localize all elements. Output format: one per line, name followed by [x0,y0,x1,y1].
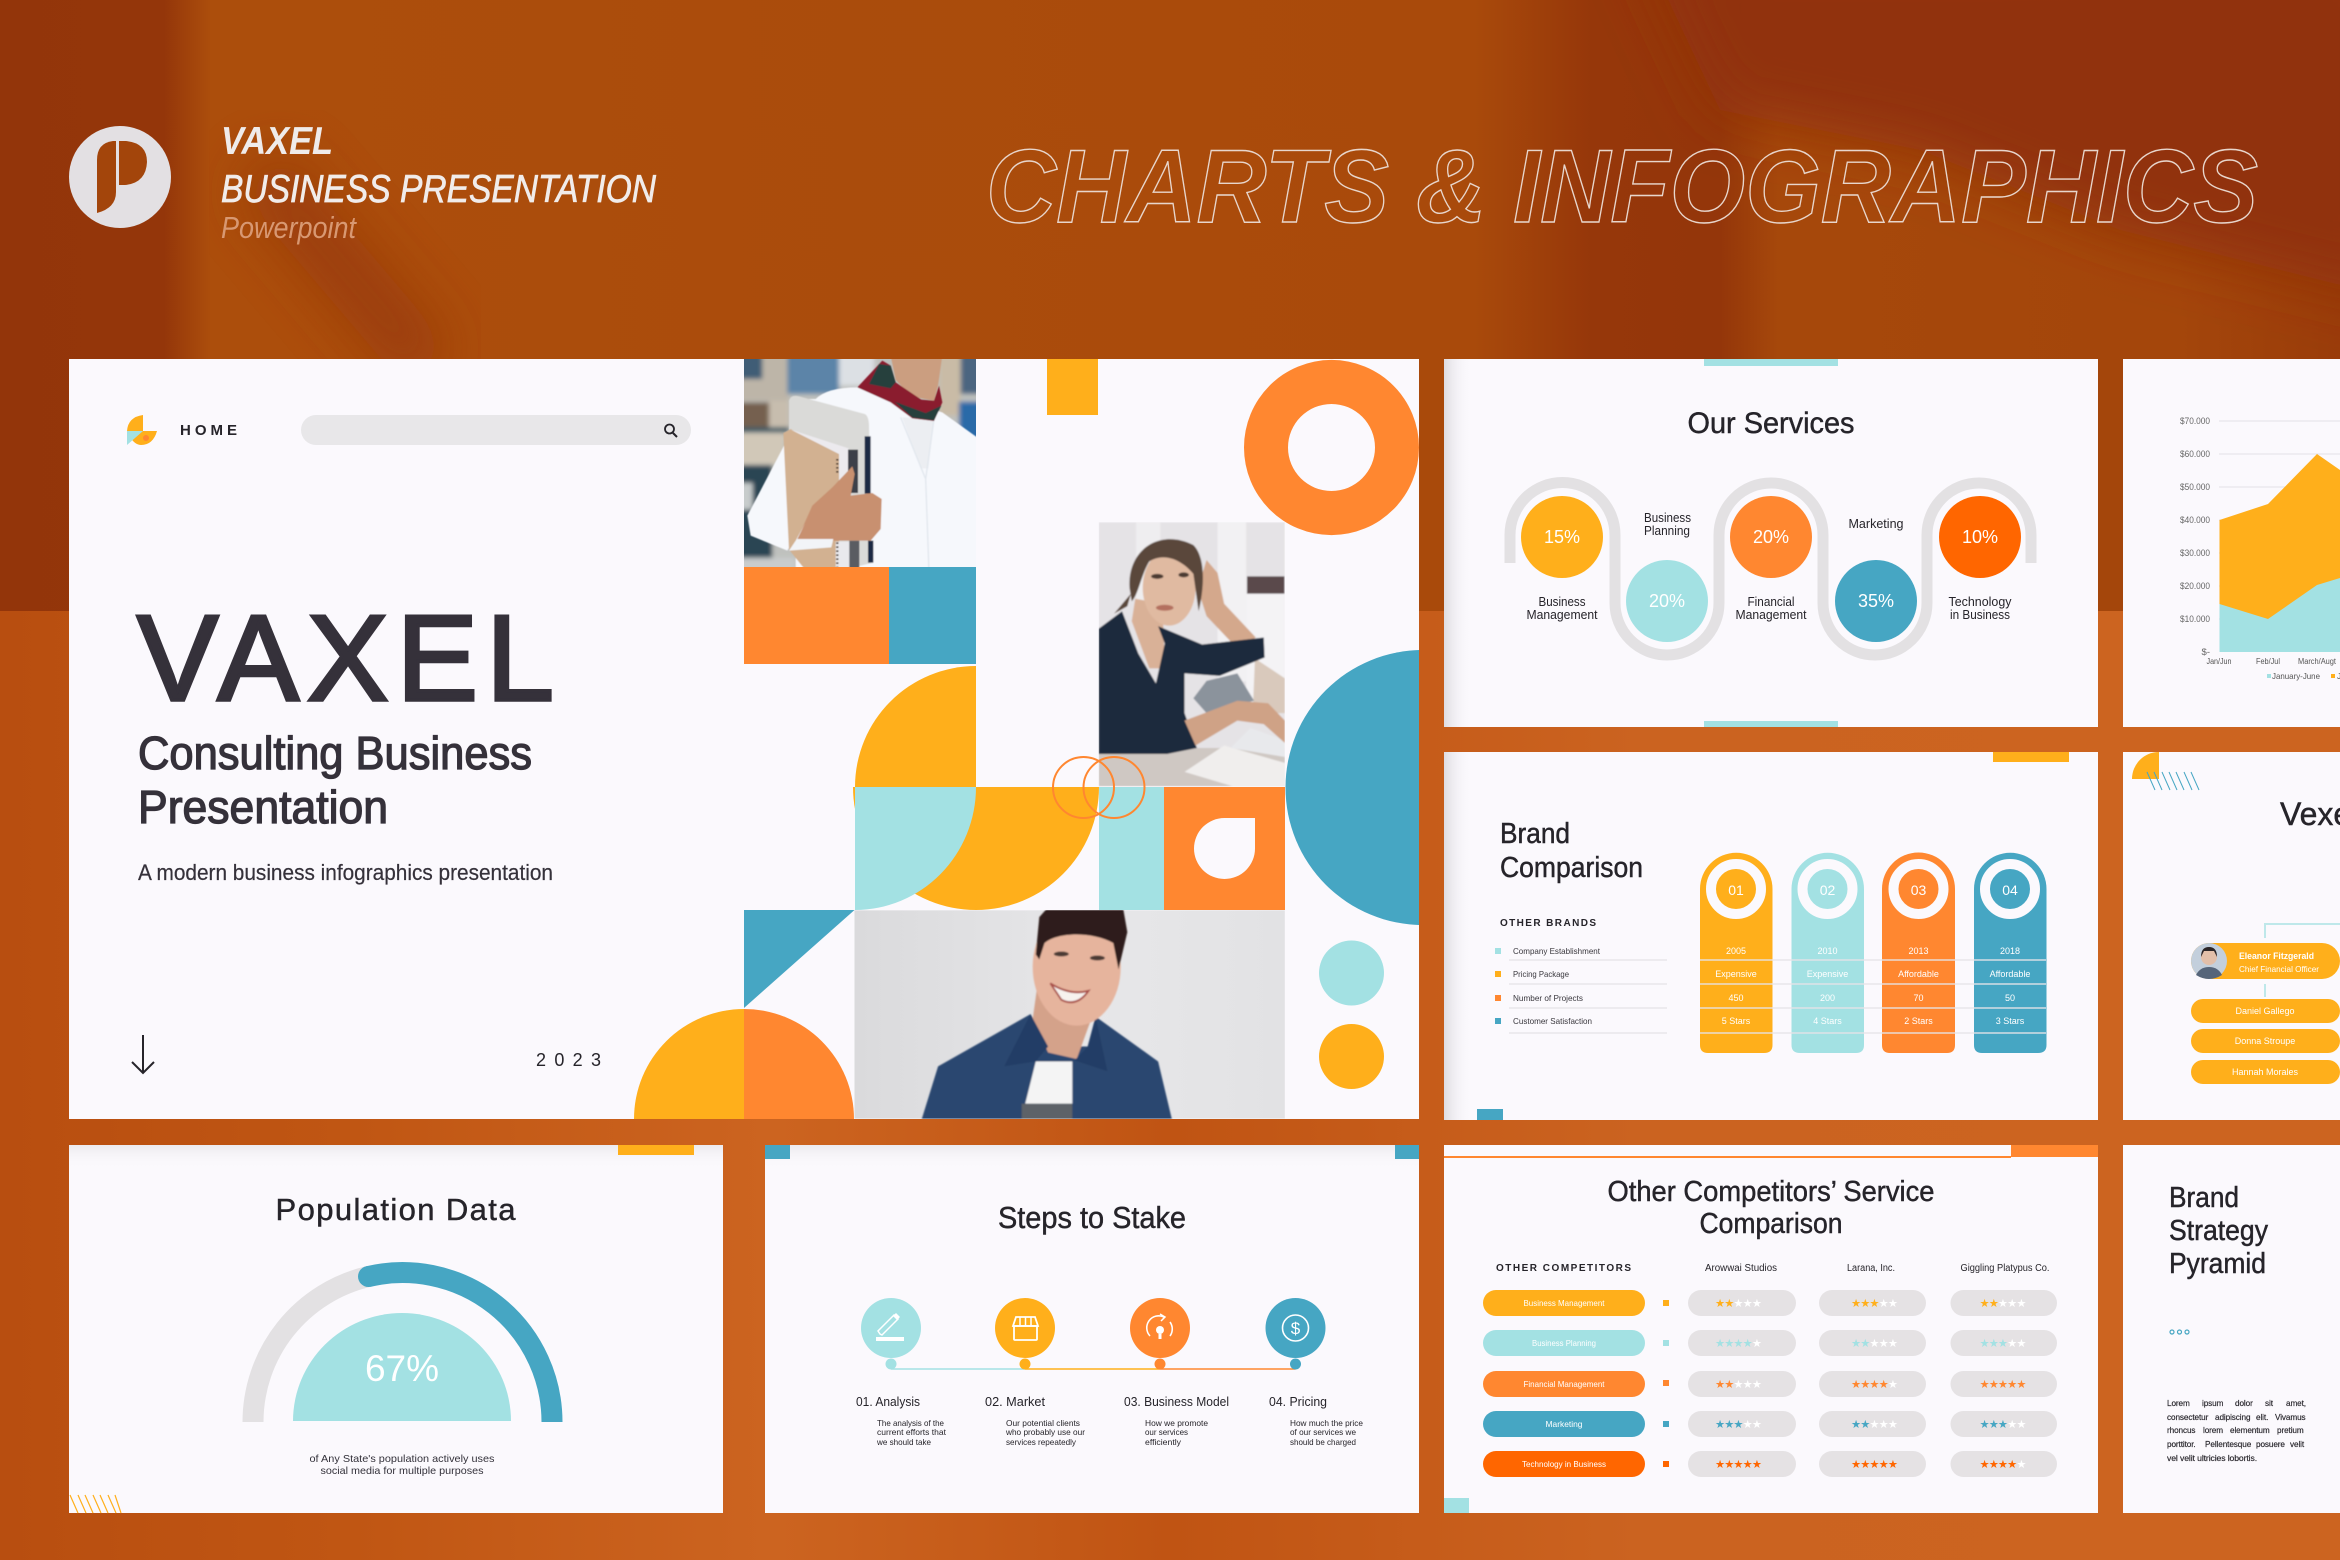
service 3 [1730,496,1812,622]
heading [1608,1176,1934,1240]
cover nav label: HOME [180,422,237,439]
service 3: Financial [1748,594,1795,609]
body text: vel velit ultricies lobortis. [2167,1454,2257,1463]
step 2 text: Our potential clients [1006,1418,1080,1428]
chart axis labels: $10.000 [2180,614,2210,625]
step 2 text [985,1394,1085,1447]
row: business planning: ★★★★★ [1715,1337,1762,1350]
service 2: 20% [1649,591,1685,611]
row: marketing: ★★★★★ [1715,1418,1762,1431]
shape: teal circle [1319,940,1384,1006]
body text: pretium [2277,1426,2304,1435]
body text: ipsum [2202,1399,2224,1408]
decoration: quarter circle [2132,752,2159,779]
column 02: 4 Stars [1813,1016,1842,1026]
photo: smiling man [854,907,1285,1126]
row: financial management [1483,1371,2057,1397]
step 1 text [856,1394,947,1447]
panel: our services [1444,359,2098,727]
column 03: 70 [1913,993,1924,1003]
body text: sit [2265,1399,2274,1408]
service 5 [1939,496,2021,622]
service 5: 10% [1962,527,1998,547]
row: technology in business: ★★★★★ [1980,1458,2026,1471]
row: marketing: Marketing [1546,1419,1583,1429]
body text: consectetur [2167,1413,2209,1422]
step 3 text: 03. Business Model [1124,1394,1229,1409]
row: marketing [1483,1411,2057,1437]
body text: posuere [2256,1440,2285,1449]
legend: Company Establishment [1513,946,1601,956]
legend: Customer Satisfaction [1513,1016,1592,1026]
chart axis labels: $30.000 [2180,548,2210,559]
row: business management: Business Management [1524,1298,1605,1308]
heading: Comparison [1500,852,1643,884]
shape: yellow circle [1319,1024,1384,1089]
column 04: 2018 [2000,946,2020,956]
gauge chart [253,1266,552,1422]
service 5: Technology [1948,594,2012,609]
row: business planning: ★★★★★ [1851,1337,1898,1350]
cover subtitle: Consulting Business [138,727,532,779]
heading: Brand [2169,1182,2239,1214]
step 4 text: How much the price [1290,1418,1363,1428]
panel: brand strategy pyramid [2123,1145,2340,1513]
column 04: Affordable [1990,969,2030,979]
body text: Pellentesque [2205,1440,2252,1449]
header brand logo [69,126,171,228]
shape: yellow half circle [853,787,1099,910]
header brand text [221,120,657,245]
chart x labels [2206,657,2337,666]
cover subtitle: Presentation [138,781,388,833]
header brand text: Powerpoint [221,210,357,245]
step 3 text: How we promote [1145,1418,1208,1428]
chart x labels: Jan/Jun [2206,657,2232,666]
legend: Pricing Package [1513,969,1569,979]
icon: pencil [861,1298,921,1358]
service 1: Business [1538,594,1586,609]
step 3 text: our services [1145,1427,1188,1437]
service 3: Management [1736,607,1807,622]
step 4 text: of our services we [1290,1427,1356,1437]
body text [2167,1399,2306,1463]
icon: dollar [1266,1298,1326,1358]
column 02 [1792,853,1864,1053]
person pill: Eleanor Fitzgerald [2239,951,2314,961]
step 2 text: services repeatedly [1006,1437,1077,1447]
service 3: 20% [1753,527,1789,547]
photo: woman with notebook [744,359,976,567]
service 1: Management [1526,607,1598,622]
person pill: Chief Financial Officer [2239,964,2319,974]
chart axis labels: $- [2202,647,2210,658]
shape: blue block [889,567,976,664]
step 4 text [1269,1394,1363,1447]
row: financial management: ★★★★★ [1980,1378,2026,1391]
heading: Pyramid [2169,1248,2266,1280]
chart legend: January-June [2272,671,2320,681]
shape: yellow quarter circle [855,666,976,787]
column 01 [1700,853,1772,1053]
body text: elementum [2230,1426,2270,1435]
chart axis labels [2180,416,2210,658]
panel: steps to stake [765,1145,1419,1513]
panel: cover slide [69,359,1419,1119]
table headers: OTHER COMPETITORS [1496,1263,1631,1274]
service 4: 35% [1858,591,1894,611]
heading: Population Data [276,1192,516,1227]
step 1 text: 01. Analysis [856,1394,920,1409]
cover year: 2023 [536,1050,601,1070]
row: business management: ★★★★★ [1980,1297,2026,1310]
legend: Number of Projects [1513,993,1583,1003]
row: marketing: ★★★★★ [1980,1418,2026,1431]
column 01: 2005 [1726,946,1746,956]
row: business management: ★★★★★ [1851,1297,1898,1310]
timeline [886,1358,1301,1370]
heading [2169,1182,2268,1280]
panel: vexel organisation chart [2123,752,2340,1120]
step 2 text: 02. Market [985,1394,1045,1409]
row: business management [1483,1290,2057,1316]
chart x labels: Feb/Jul [2256,657,2280,666]
panel: competitors comparison [1444,1145,2098,1513]
service 4 [1835,516,1917,642]
body text: elit. [2256,1413,2268,1422]
team pill: Donna Stroupe: Donna Stroupe [2235,1036,2295,1046]
heading: Steps to Stake [998,1200,1186,1235]
heading: Our Services [1688,407,1854,440]
panel: area chart slide [2123,359,2340,727]
column 01: 01 [1728,882,1744,898]
step 2 text: who probably use our [1005,1427,1085,1437]
service 4: Marketing [1848,516,1904,531]
service 1: 15% [1544,527,1580,547]
column 02: 2010 [1817,946,1838,956]
shape: orange outline circles [1053,757,1144,818]
shape: orange block [744,567,889,664]
photo: woman at desk [1099,522,1285,786]
shape: blue half circle [1286,650,1419,925]
table headers [1496,1263,2050,1274]
gauge chart: 67% [365,1348,439,1389]
icon: down arrow [132,1035,154,1073]
caption: social media for multiple purposes [320,1465,484,1477]
team pill: Hannah Morales [2191,1060,2340,1084]
panel: brand comparison [1444,752,2098,1120]
person pill [2191,943,2340,979]
header brand text: VAXEL [221,120,333,163]
service 1 [1521,496,1603,622]
step 4 text: should be charged [1290,1437,1356,1447]
shape: orange donut [1244,360,1419,535]
service 2 [1626,510,1708,642]
chart axis labels: $50.000 [2180,482,2210,493]
body text: dolor [2235,1399,2253,1408]
column 01: Expensive [1715,969,1757,979]
body text: porttitor. [2167,1440,2196,1449]
heading: Brand [1500,818,1570,850]
column 01: 450 [1728,993,1744,1003]
team pill: Daniel Gallego [2191,999,2340,1023]
header brand text: BUSINESS PRESENTATION [221,168,657,211]
service 5: in Business [1950,607,2010,622]
heading [1500,818,1643,884]
table headers: Larana, Inc. [1847,1263,1895,1274]
step 3 text [1124,1394,1229,1447]
step 1 text: current efforts that [877,1427,947,1437]
row: business planning: Business Planning [1532,1338,1596,1348]
column 02: Expensive [1807,969,1848,979]
wave track [1510,482,2031,655]
row: business management: ★★★★★ [1715,1297,1762,1310]
caption: of Any State's population actively uses [310,1453,494,1465]
header title outlined: CHARTS & INFOGRAPHICS [986,129,2258,245]
shape: teal quarter circle [855,787,976,910]
row: financial management: ★★★★★ [1851,1378,1898,1391]
shape: orange block with drop [1164,787,1285,910]
team pill: Daniel Gallego: Daniel Gallego [2235,1006,2295,1016]
icon: lightbulb cycle [1130,1298,1190,1358]
body text: rhoncus [2167,1426,2195,1435]
heading: Strategy [2169,1215,2268,1247]
chart axis labels: $40.000 [2180,515,2210,526]
team pill: Donna Stroupe [2191,1029,2340,1053]
icon: store [995,1298,1055,1358]
body text: adipiscing [2215,1413,2251,1422]
icon: dollar: $ [1291,1319,1301,1338]
heading: Other Competitors’ Service [1608,1176,1934,1208]
column 02: 200 [1820,993,1835,1003]
row: financial management: Financial Management [1524,1379,1605,1389]
column 03: 2 Stars [1904,1016,1933,1026]
column 04: 3 Stars [1996,1016,2025,1026]
row: business planning [1483,1330,2057,1356]
column 03: 2013 [1908,946,1929,956]
shape: blue triangle [744,910,854,1008]
team pill: Hannah Morales: Hannah Morales [2232,1067,2299,1077]
row: marketing: ★★★★★ [1851,1418,1898,1431]
area chart [2219,421,2340,652]
caption [310,1453,494,1477]
column 04: 04 [2002,882,2018,898]
service 2: Planning [1644,523,1690,538]
row: technology in business: Technology in Business [1522,1459,1606,1469]
body text: amet, [2286,1399,2306,1408]
table headers: Arowwai Studios [1705,1263,1777,1274]
chart axis labels: $20.000 [2180,581,2210,592]
body text: velit [2290,1440,2305,1449]
column 01: 5 Stars [1722,1016,1751,1026]
shape: teal block [1099,787,1164,910]
cover tagline: A modern business infographics presentation [138,860,553,885]
chart axis labels: $60.000 [2180,449,2210,460]
geometric shapes and photos [634,359,1419,1119]
step 1 text: we should take [876,1437,931,1447]
connectors [2265,924,2340,997]
cover logo [127,415,157,445]
search bar [301,415,691,445]
service 2: Business [1644,510,1691,525]
shape: yellow square [1047,359,1098,415]
shape: yellow and orange half circle [634,1009,854,1119]
column 03: 03 [1911,882,1926,898]
row: financial management: ★★★★★ [1715,1378,1762,1391]
row: business planning: ★★★★★ [1980,1337,2026,1350]
chart x labels: March/Augt [2298,657,2337,666]
legend [1495,946,1601,1026]
body text: lorem [2203,1426,2223,1435]
step 3 text: efficiently [1145,1437,1182,1447]
column 03 [1882,852,1955,1053]
row: technology in business [1483,1451,2057,1477]
cover title: VAXEL [137,590,554,726]
body text: Vivamus [2275,1413,2306,1422]
dots [2170,1330,2189,1334]
step 4 text: 04. Pricing [1269,1394,1327,1409]
table headers: Giggling Platypus Co. [1960,1263,2050,1274]
subheading: OTHER BRANDS [1500,918,1596,929]
heading: Comparison [1700,1208,1842,1240]
cover subtitle [138,727,532,833]
column 03: Affordable [1898,969,1939,979]
row: technology in business: ★★★★★ [1851,1458,1898,1471]
body text: Lorem [2167,1399,2190,1408]
column 04 [1974,853,2046,1053]
step 1 text: The analysis of the [877,1418,944,1428]
row: technology in business: ★★★★★ [1715,1458,1762,1471]
column 04: 50 [2005,993,2015,1003]
panel: population data [69,1145,723,1513]
chart axis labels: $70.000 [2180,416,2210,427]
column 02: 02 [1820,882,1835,898]
